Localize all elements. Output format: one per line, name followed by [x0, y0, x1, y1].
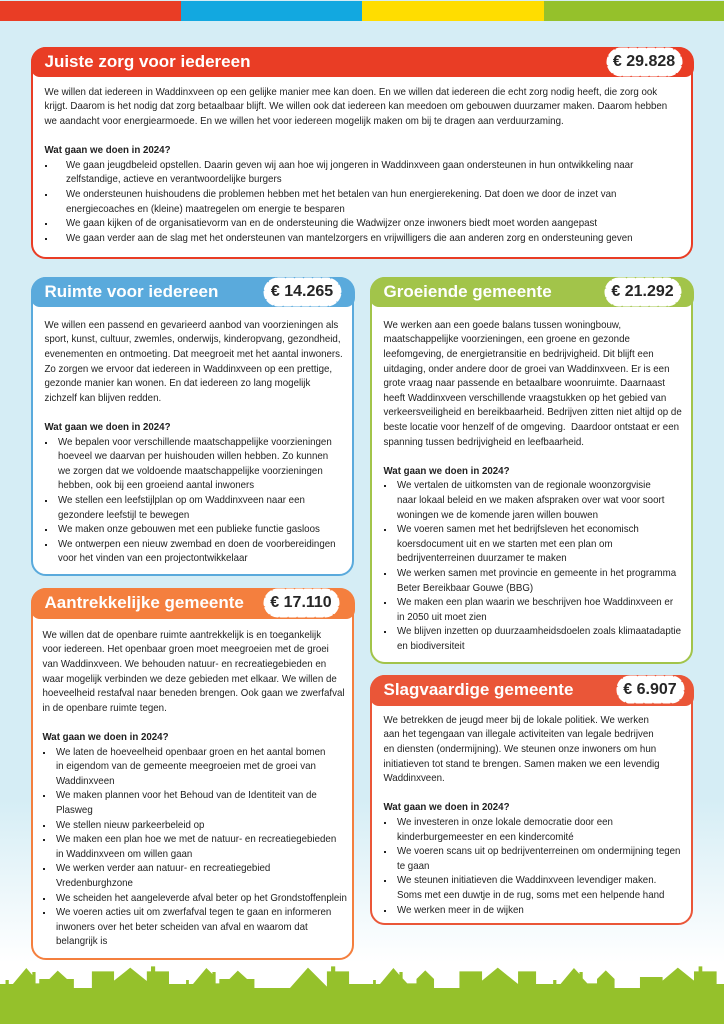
heading: Ruimte voor iedereen — [44, 282, 218, 300]
text block: kinderburgemeester en een kindercomité — [397, 832, 574, 843]
text block: grote vraag naar passende en betaalbare woonruimte. Daarnaast — [384, 378, 665, 389]
header band: Groeiende gemeente — [370, 276, 694, 306]
price badge: € 21.292 — [611, 283, 674, 300]
text block: naar lokaal beleid en we maken afspraken over wat voor soort — [397, 495, 664, 506]
text block: aan het tegengaan van illegale activiteiten van legale bedrijven — [384, 729, 654, 740]
text block: We maken plannen voor het Behoud van de Identiteit van de — [56, 790, 317, 801]
text block: Soms met een duwtje in de rug, soms met een helpende hand — [397, 890, 664, 901]
panel: Aantrekkelijke gemeente — [31, 588, 354, 960]
text block: uitdaging, onder andere door de groei van Waddinxveen. Er is een — [384, 364, 670, 375]
text block: leefomgeving, de energietransitie en bedrijvigheid. Dit blijft een — [384, 349, 654, 360]
text block: We willen dat de openbare ruimte aantrekkelijk is en toegankelijk — [42, 630, 321, 641]
text block: in 2050 uit moet zien — [397, 612, 487, 623]
text block: en biodiversiteit — [397, 641, 465, 652]
text block: We ondersteunen huishoudens die problemen hebben met het betalen van hun energierekening. Dat doen we door de inzet van — [66, 189, 616, 200]
text block: Plasweg — [56, 805, 93, 816]
text block: zelfstandige, actieve en verantwoordelijke burgers — [66, 174, 282, 185]
text block: We laten de hoeveelheid openbaar groen en het aantal bomen — [56, 747, 325, 758]
price badge — [606, 48, 682, 76]
text block: zichzelf kan blijven redden. — [44, 393, 161, 404]
text block: We blijven inzetten op duurzaamheidsdoelen zoals klimaatadaptie — [397, 626, 681, 637]
text block: We werken samen met provincie en gemeente in het programma — [397, 568, 676, 579]
text block: voor het vinden van een projectontwikkelaar — [58, 553, 248, 564]
text block — [44, 320, 343, 564]
text block: We voeren samen met het bedrijfsleven het economisch — [397, 524, 639, 535]
text block: Vredenburghzone — [56, 878, 133, 889]
text block: We maken een plan hoe we met de natuur- en recreatiegebieden — [56, 834, 336, 845]
text block: We betrekken de jeugd meer bij de lokale politiek. We werken — [384, 715, 649, 726]
heading: Aantrekkelijke gemeente — [44, 592, 244, 612]
text block: We voeren scans uit op bedrijventerreinen om ondermijning tegen — [397, 846, 680, 857]
text block: koersdocument uit en we starten met een plan om — [397, 539, 613, 550]
text block: Wat gaan we doen in 2024? — [384, 802, 510, 813]
text block: hoeveel we daarvan per huishouden willen hebben. Zo kunnen — [58, 451, 328, 462]
price badge — [616, 676, 684, 704]
text block: Beter Bereikbaar Gouwe (BBG) — [397, 583, 533, 594]
text block: spanning tussen bedrijvigheid en leefbaarheid. — [384, 437, 584, 448]
text block: We werken verder aan natuur- en recreatiegebied — [56, 863, 270, 874]
text block: We stellen een leefstijlplan op om Waddinxveen naar een — [58, 495, 305, 506]
text block: hebben, ook bij een groeiend aantal inwoners — [58, 480, 254, 491]
text block: We steunen initiatieven die Waddinxveen levendiger maken. — [397, 875, 656, 886]
text block: Wat gaan we doen in 2024? — [42, 732, 169, 743]
text block: We gaan verder aan de slag met het ondersteunen van mantelzorgers en vrijwilligers die aan anderen zorg en ondersteuning geven — [66, 233, 633, 244]
text block: We gaan kijken of de organisatievorm van en de ondersteuning die Wadwijzer onze inwoners biedt moet worden aangepast — [66, 218, 597, 229]
text block: te gaan — [397, 861, 429, 872]
text block: inwoners over het beter scheiden van afval en waarom dat — [56, 922, 308, 933]
panel: Juiste zorg voor iedereen — [31, 47, 693, 259]
text block: Waddinxveen. — [384, 773, 445, 784]
text block: in de openbare ruimte tegen. — [42, 703, 167, 714]
text block: Wat gaan we doen in 2024? — [44, 422, 171, 433]
text block: We stellen nieuw parkeerbeleid op — [56, 820, 204, 831]
price badge: € 6.907 — [623, 681, 677, 698]
text block: belangrijk is — [56, 936, 107, 947]
price badge — [264, 588, 340, 618]
text block — [384, 320, 682, 652]
price badge: € 29.828 — [613, 53, 675, 70]
text block: verkeersveiligheid en bereikbaarheid. Bedrijven zitten niet altijd op de — [384, 407, 682, 418]
text block: evenementen en ontmoeting. Dat meegroeit met het aantal inwoners. — [44, 349, 343, 360]
text block: We werken aan een goede balans tussen woningbouw, — [384, 320, 621, 331]
header band: Juiste zorg voor iedereen — [30, 46, 694, 76]
price badge: € 14.265 — [271, 283, 333, 300]
price badge — [604, 278, 682, 306]
text block: Waddinxveen — [56, 776, 115, 787]
text block: heeft Waddinxveen verschillende vraagstukken op het gebied van — [384, 393, 666, 404]
text block: maatschappelijke voorzieningen, een groene en gezonde — [384, 334, 630, 345]
price badge: € 17.110 — [270, 594, 332, 611]
text block: hoeveelheid restafval naar beneden brengen. Ook gaan we zwerfafval — [42, 688, 345, 699]
text block: We werken meer in de wijken — [397, 905, 524, 916]
text block: Zo zorgen we ervoor dat iedereen in Waddinxveen op een prettige, — [44, 364, 332, 375]
header band: Ruimte voor iedereen — [30, 276, 354, 306]
text block — [384, 715, 680, 916]
panel: Groeiende gemeente — [370, 277, 693, 664]
text block — [42, 630, 347, 947]
text block: we zorgen dat we voldoende maatschappelijke voorzieningen — [58, 466, 323, 477]
top colour bar — [0, 1, 724, 21]
text block: waar mogelijk verbinden we deze gebieden met elkaar. We willen de — [42, 674, 337, 685]
text block: Wat gaan we doen in 2024? — [44, 145, 171, 156]
heading: Groeiende gemeente — [384, 282, 552, 300]
text block: We maken onze gebouwen met een publieke functie gasloos — [58, 524, 320, 535]
text block — [44, 87, 667, 244]
heading: Slagvaardige gemeente — [384, 680, 573, 698]
skyline silhouette — [0, 966, 724, 1024]
text block: woningen we de komende jaren willen bouwen — [397, 510, 598, 521]
text block: We ontwerpen een nieuw zwembad en doen de voorbereidingen — [58, 539, 336, 550]
text block: we aandacht voor energiearmoede. En we willen het voor iedereen mogelijk maken om bij te dragen aan verduurzaming. — [44, 116, 564, 127]
text block: beste locatie voor henzelf of de omgeving. Daardoor ontstaat er een — [384, 422, 679, 433]
text block: Wat gaan we doen in 2024? — [384, 466, 510, 477]
text block: in Waddinxveen om willen gaan — [56, 849, 192, 860]
text block: voor iedereen. Het openbaar groen moet meegroeien met de groei — [42, 644, 329, 655]
text block: We willen een passend en gevarieerd aanbod van voorzieningen als — [44, 320, 338, 331]
text block: in eigendom van de gemeente meegroeien met de groei van — [56, 761, 316, 772]
text block: We gaan jeugdbeleid opstellen. Daarin geven wij aan hoe wij jongeren in Waddinxveen gaan ondersteunen in hun ontwikkeling naar — [66, 160, 633, 171]
text block: We vertalen de uitkomsten van de regionale woonzorgvisie — [397, 480, 651, 491]
header band: Aantrekkelijke gemeente — [30, 588, 354, 618]
text block: We maken een plan waarin we beschrijven hoe Waddinxveen er — [397, 597, 673, 608]
text block: bedrijventerreinen duurzamer te maken — [397, 553, 567, 564]
panel: Ruimte voor iedereen — [31, 277, 354, 576]
text block: We scheiden het aangeleverde afval beter op het Grondstoffenplein — [56, 893, 347, 904]
text block: krijgt. Daarom is het nodig dat zorg betaalbaar blijft. We willen ook dat iedereen kan meedoen om gebouwen duurzamer maken. Daarom hebben — [44, 101, 667, 112]
price badge — [264, 278, 342, 306]
text block: gezonde manier kan wonen. En dat iedereen zo lang mogelijk — [44, 378, 310, 389]
text block: We bepalen voor verschillende maatschappelijke voorzieningen — [58, 437, 332, 448]
text block: van Waddinxveen. We behouden natuur- en recreatiegebieden en — [42, 659, 326, 670]
text block: We willen dat iedereen in Waddinxveen op een gelijke manier mee kan doen. En we willen dat iedereen die echt zorg nodig heeft, die zorg ook — [44, 87, 657, 98]
text block: energiecoaches en (kleine) maatregelen om energie te besparen — [66, 204, 345, 215]
header band: Slagvaardige gemeente — [370, 674, 694, 706]
text block: sport, kunst, cultuur, zwemles, onderwijs, kinderopvang, gezondheid, — [44, 334, 341, 345]
panel: Slagvaardige gemeente — [370, 675, 693, 925]
text block: initiatieven tot stand te brengen. Samen maken we een levendig — [384, 759, 660, 770]
text block: We investeren in onze lokale democratie door een — [397, 817, 613, 828]
heading: Juiste zorg voor iedereen — [44, 52, 250, 70]
text block: We voeren acties uit om zwerfafval tegen te gaan en informeren — [56, 907, 331, 918]
text block: en diensten (ondermijning). We steunen onze inwoners om hun — [384, 744, 656, 755]
text block: gezondere leefstijl te bewegen — [58, 510, 189, 521]
